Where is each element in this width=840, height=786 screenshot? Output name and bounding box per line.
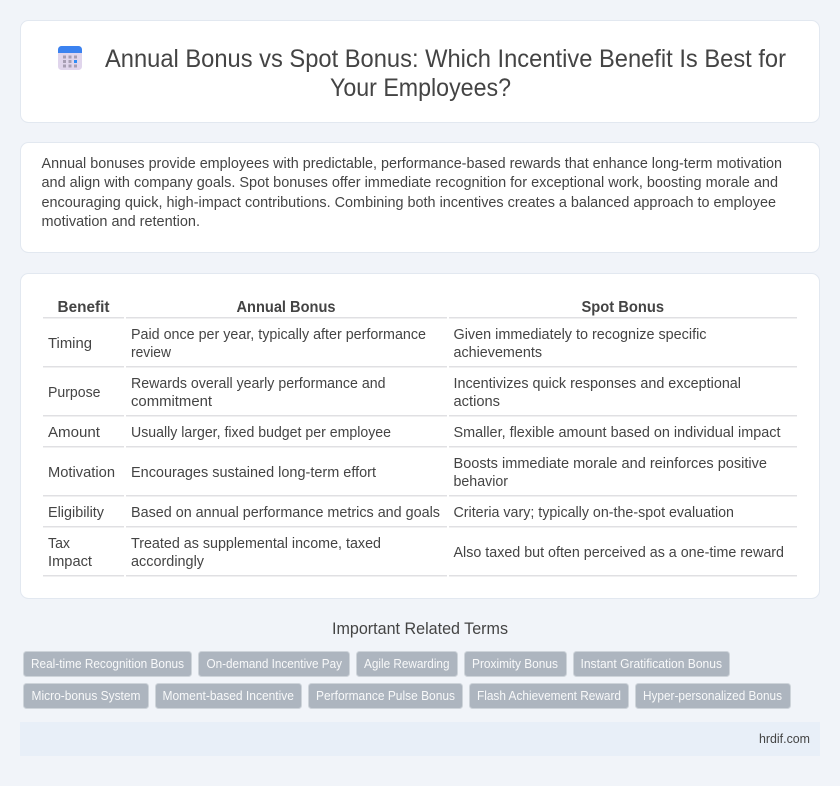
table row: motivation: Encourages sustained long-term effort <box>131 464 377 481</box>
table row: motivation <box>43 455 797 496</box>
table row: eligibility: Based on annual performance metrics and goals <box>131 504 440 521</box>
table row: purpose <box>43 375 797 416</box>
related terms chips <box>24 652 790 708</box>
related terms chips: Agile Rewarding <box>364 657 450 671</box>
table row: amount <box>43 424 797 448</box>
related terms chips: Performance Pulse Bonus <box>316 689 455 703</box>
table row: motivation: behavior <box>454 473 508 490</box>
text block: introduction paragraph: encouraging quick, high-impact contributions. Combining both incentives creates a balanced approach to employee <box>42 194 776 211</box>
table row: tax impact: Treated as supplemental income, taxed <box>131 535 381 552</box>
text block: introduction paragraph <box>42 155 782 230</box>
table row: amount: Usually larger, fixed budget per employee <box>131 424 391 441</box>
table row: eligibility: Criteria vary; typically on-the-spot evaluation <box>454 504 734 521</box>
table row: timing: Given immediately to recognize specific <box>454 326 707 343</box>
footer: hrdif.com <box>759 731 810 746</box>
table row: purpose: actions <box>454 393 500 410</box>
related terms chips: Moment-based Incentive <box>162 689 294 703</box>
panel: introduction <box>20 142 820 252</box>
table row: motivation: Motivation <box>48 464 115 481</box>
table row: purpose: commitment <box>131 393 213 410</box>
table row: timing <box>43 326 797 368</box>
footer <box>20 722 820 756</box>
table row: tax impact: accordingly <box>131 553 204 570</box>
table row: amount: Smaller, flexible amount based on individual impact <box>454 424 781 441</box>
related terms chips: Proximity Bonus <box>472 657 558 671</box>
related terms chips: Instant Gratification Bonus <box>580 657 722 671</box>
table row: purpose: Incentivizes quick responses and exceptional <box>454 375 741 392</box>
table row: motivation: Boosts immediate morale and reinforces positive <box>454 455 767 472</box>
table row: timing: achievements <box>454 344 542 361</box>
icon: calendar <box>58 46 82 70</box>
table row: purpose: Purpose <box>48 384 100 401</box>
table header: Spot Bonus <box>582 299 664 316</box>
table row: eligibility: Eligibility <box>48 504 104 521</box>
table row: purpose: Rewards overall yearly performance and <box>131 375 386 392</box>
text block: introduction paragraph: motivation and retention. <box>42 213 200 230</box>
text block: introduction paragraph: Annual bonuses provide employees with predictable, performance-based rewards that enhance long-term motivation <box>42 155 782 172</box>
table row: timing: Paid once per year, typically after performance <box>131 326 426 343</box>
table row: tax impact: Impact <box>48 553 93 570</box>
related terms chips: Hyper-personalized Bonus <box>643 689 782 703</box>
table row: timing: Timing <box>48 335 92 352</box>
table header <box>43 299 797 318</box>
related terms chips: On-demand Incentive Pay <box>206 657 343 671</box>
panel: title card <box>20 20 820 122</box>
title: Annual Bonus vs Spot Bonus: Which Incentive Benefit Is Best for <box>105 45 786 73</box>
title <box>105 45 786 102</box>
text block: introduction paragraph: and align with company goals. Spot bonuses offer immediate recognition for exceptional work, boosting morale and <box>42 174 778 191</box>
related terms chips: Real-time Recognition Bonus <box>31 657 184 671</box>
table row: eligibility <box>43 504 797 528</box>
table row: timing: review <box>131 344 171 361</box>
table row: tax impact: Also taxed but often perceived as a one-time reward <box>454 544 784 561</box>
related terms chips: Micro-bonus System <box>32 689 140 703</box>
panel: comparison table <box>20 274 820 598</box>
related terms chips: Flash Achievement Reward <box>477 689 621 703</box>
table row: tax impact <box>43 535 797 576</box>
heading: important related terms: Important Related Terms <box>332 620 508 638</box>
table header: Benefit <box>58 299 110 316</box>
table header: Annual Bonus <box>236 299 336 316</box>
table row: amount: Amount <box>48 424 101 441</box>
table row: tax impact: Tax <box>48 535 70 552</box>
title: Your Employees? <box>330 74 511 102</box>
